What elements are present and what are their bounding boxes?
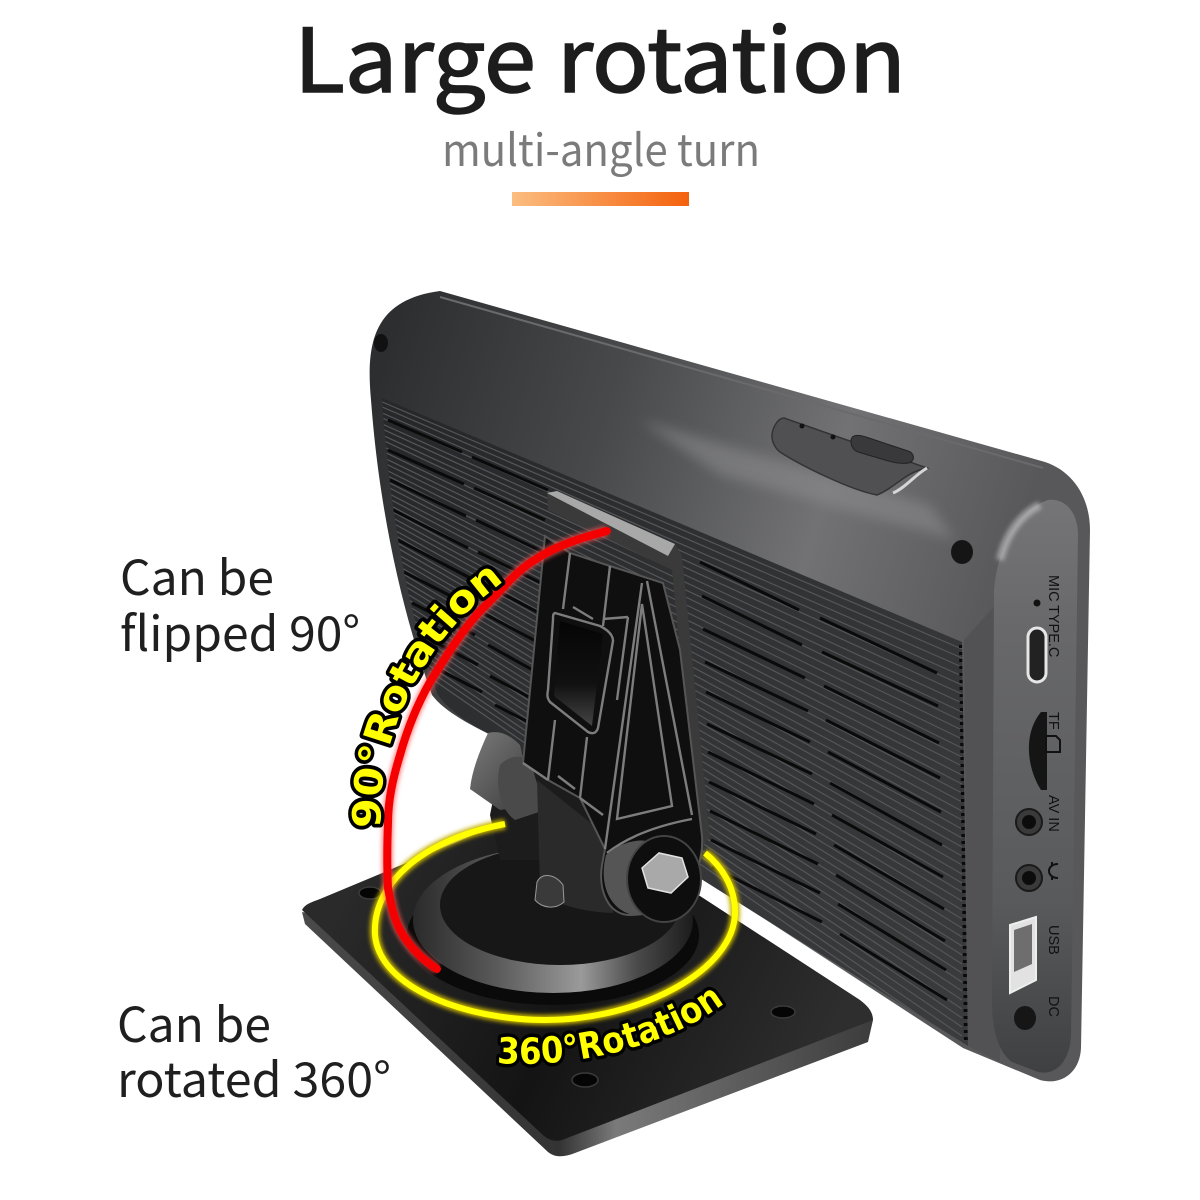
hole: corner screw	[951, 540, 973, 564]
mounting plate base	[302, 826, 873, 1156]
side face	[992, 500, 1078, 1073]
back plate highlight	[547, 491, 675, 556]
bracket back plate	[547, 491, 710, 850]
vent panel	[370, 390, 980, 1060]
port labels	[1045, 575, 1061, 1017]
subtitle: multi-angle turn	[442, 115, 760, 179]
top highlight band	[640, 420, 955, 540]
shadow fill behind neck	[490, 740, 610, 860]
knob boss	[498, 757, 545, 820]
base peg	[535, 876, 564, 907]
device shell	[370, 291, 1090, 1081]
base ring	[413, 847, 693, 993]
port labels: DC	[1045, 996, 1061, 1017]
label: rotated 360: Can be	[117, 986, 271, 1056]
plate top	[302, 826, 873, 1141]
plate edge	[302, 912, 873, 1156]
locking knob	[470, 732, 535, 810]
port: DC	[1014, 1006, 1036, 1030]
vent slits	[388, 420, 947, 1000]
base shadow	[407, 865, 699, 1005]
hex bolt	[642, 853, 688, 893]
bracket window	[554, 621, 603, 726]
hole: top-left screw	[374, 334, 388, 352]
port labels: TYPE.C	[1045, 605, 1061, 657]
orange accent bar	[512, 192, 689, 206]
bracket body	[523, 536, 702, 915]
port labels: MIC	[1045, 575, 1061, 602]
mount bracket	[470, 491, 710, 922]
neck	[537, 780, 615, 913]
arm shading	[604, 841, 650, 915]
bracket ribs	[523, 553, 692, 853]
lower band shadow	[964, 600, 1000, 1062]
port labels: AV IN	[1045, 795, 1061, 832]
device: rear of monitor	[370, 291, 1090, 1081]
pivot boss	[627, 836, 701, 922]
port: type-C	[1028, 628, 1046, 682]
swivel base disc	[407, 845, 699, 1005]
base top	[440, 845, 680, 965]
top switch indicators	[800, 424, 836, 440]
plate screw holes	[359, 887, 795, 1087]
curved label: 90 rotation: 90°Rotation	[348, 565, 506, 830]
top switch recess	[772, 418, 927, 495]
icon: TF card	[1046, 736, 1060, 752]
port: TF slot	[1029, 712, 1047, 790]
side highlight	[1000, 505, 1040, 560]
port: AV IN jack	[1016, 809, 1042, 835]
port: headphone jack	[1016, 865, 1042, 891]
dotted vent edge	[961, 645, 966, 1044]
yellow 360 rotation ring	[375, 824, 735, 1020]
label: flipped 90: flipped 90°	[120, 595, 360, 665]
recess highlight	[893, 468, 927, 493]
label: rotated 360: rotated 360°	[117, 1041, 391, 1111]
curved label: 360 rotation: 360°Rotation	[496, 987, 726, 1068]
port: MIC dot	[1034, 600, 1040, 606]
top switch button	[851, 435, 913, 463]
label: flipped 90: Can be	[120, 539, 274, 609]
red 90 rotation arc	[387, 531, 607, 969]
top rim line	[440, 297, 1043, 468]
port: USB	[1010, 917, 1036, 993]
icon: headphones	[1049, 862, 1058, 880]
port labels: USB	[1045, 925, 1061, 955]
port labels: TF	[1045, 712, 1061, 730]
